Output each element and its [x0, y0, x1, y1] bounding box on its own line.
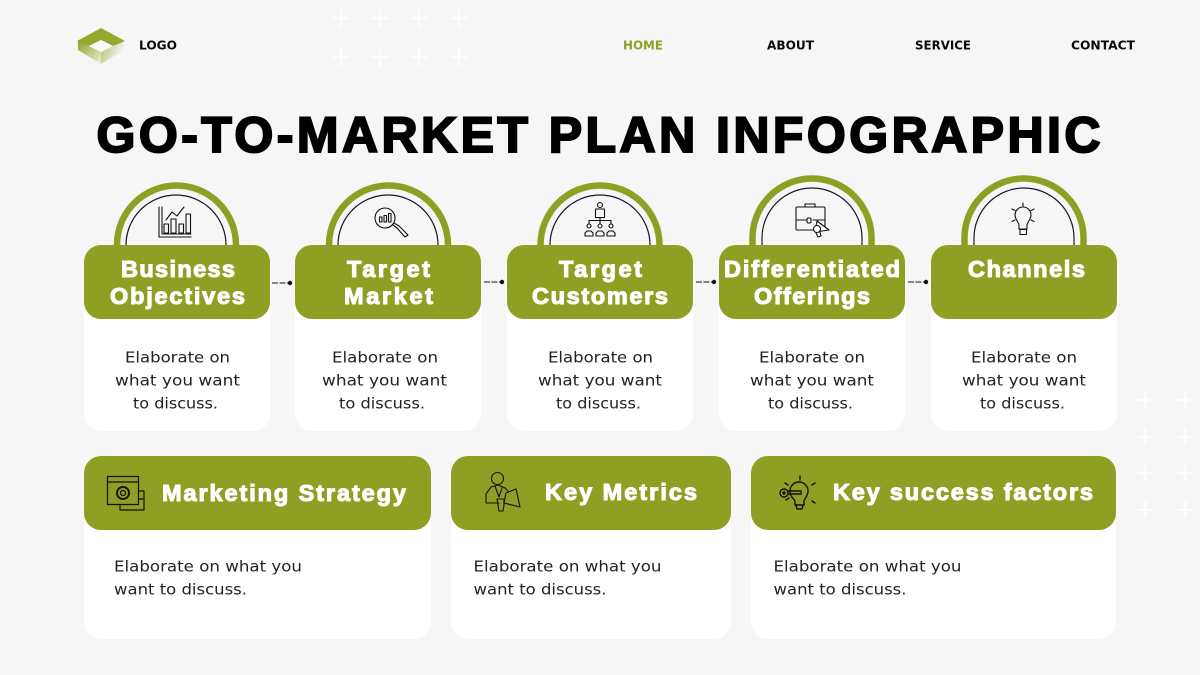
- arrow: [484, 280, 504, 284]
- icon: bar chart with trend: [159, 207, 191, 237]
- panel: marketing strategy: [84, 456, 431, 639]
- arch: [540, 186, 660, 250]
- description: to discuss.: [339, 394, 425, 412]
- header: [451, 456, 731, 530]
- heading: Channels: [968, 256, 1085, 282]
- arch: [329, 186, 448, 250]
- arrow: [908, 280, 928, 284]
- card body: [931, 290, 1117, 431]
- description: what you want: [322, 372, 447, 390]
- heading: Customers: [532, 283, 668, 309]
- arrow: [696, 280, 716, 284]
- panel: key metrics: [451, 456, 731, 639]
- description: Elaborate on: [759, 348, 865, 366]
- icon: browser window with gear: [108, 476, 144, 510]
- description: to discuss.: [980, 394, 1065, 412]
- icon: light bulb with key: [780, 476, 815, 509]
- icon: magnifier with bars: [375, 208, 408, 237]
- header: [84, 245, 270, 319]
- decorative plus pattern: right: [1137, 392, 1193, 518]
- navigation menu: ABOUT: [767, 38, 815, 52]
- navigation menu: SERVICE: [915, 38, 971, 52]
- panel: business objectives: [84, 186, 270, 431]
- panel: key success factors: [751, 456, 1116, 639]
- card body: [719, 290, 905, 431]
- description: Elaborate on what you: [114, 558, 302, 576]
- description: [538, 348, 662, 412]
- icon: person holding chart: [486, 472, 520, 511]
- title: GO-TO-MARKET PLAN INFOGRAPHIC: [96, 107, 1100, 163]
- description: what you want: [538, 372, 662, 390]
- description: Elaborate on: [548, 348, 653, 366]
- description: want to discuss.: [474, 580, 606, 598]
- heading: Key success factors: [833, 479, 1093, 505]
- description: Elaborate on what you: [774, 558, 962, 576]
- heading: [344, 256, 433, 309]
- header: [931, 245, 1117, 319]
- icon: light bulb: [1012, 203, 1034, 234]
- description: what you want: [962, 372, 1086, 390]
- heading: Marketing Strategy: [162, 480, 406, 506]
- panel: differentiated offerings: [719, 178, 905, 431]
- description: [774, 558, 962, 598]
- description: want to discuss.: [774, 580, 906, 598]
- icon: briefcase with megaphone: [796, 204, 829, 237]
- description: [322, 348, 447, 412]
- card body: [84, 290, 270, 431]
- heading: Differentiated: [724, 256, 900, 282]
- panel: target market: [295, 186, 481, 431]
- header: [295, 245, 481, 319]
- decorative plus pattern: top: [332, 9, 468, 66]
- description: to discuss.: [768, 394, 853, 412]
- panel: target customers: [507, 186, 693, 431]
- navigation menu: [623, 38, 1136, 52]
- description: Elaborate on what you: [474, 558, 662, 576]
- arch: [964, 178, 1084, 250]
- heading: [532, 256, 668, 309]
- heading: Target: [347, 256, 430, 282]
- description: [750, 348, 874, 412]
- heading: Target: [559, 256, 642, 282]
- navigation menu: CONTACT: [1071, 38, 1136, 52]
- logo icon: [77, 28, 125, 64]
- description: [962, 348, 1086, 412]
- description: what you want: [750, 372, 874, 390]
- heading: [724, 256, 900, 309]
- description: Elaborate on: [125, 348, 230, 366]
- description: [115, 348, 240, 412]
- heading: Objectives: [110, 283, 245, 309]
- heading: Business: [121, 256, 235, 282]
- heading: Key Metrics: [545, 479, 697, 505]
- card body: [507, 290, 693, 431]
- description: [474, 558, 662, 598]
- description: want to discuss.: [114, 580, 247, 598]
- header: [84, 456, 431, 530]
- heading: Market: [344, 283, 433, 309]
- card body: [295, 290, 481, 431]
- header: [751, 456, 1116, 530]
- heading: Offerings: [754, 283, 870, 309]
- card body: [451, 500, 731, 639]
- icon: organisation chart: [585, 202, 615, 236]
- card body: [84, 500, 431, 639]
- logo text: LOGO: [139, 38, 177, 52]
- heading: [110, 256, 245, 309]
- description: [114, 558, 302, 598]
- header: [507, 245, 693, 319]
- arch: [752, 178, 872, 250]
- navigation menu: HOME: [623, 38, 663, 52]
- description: Elaborate on: [332, 348, 438, 366]
- panel: channels: [931, 178, 1117, 431]
- arch: [117, 186, 236, 250]
- header: [719, 245, 905, 319]
- description: Elaborate on: [971, 348, 1077, 366]
- description: to discuss.: [133, 394, 218, 412]
- arrow: [272, 281, 292, 285]
- card body: [751, 500, 1116, 639]
- description: what you want: [115, 372, 240, 390]
- description: to discuss.: [556, 394, 641, 412]
